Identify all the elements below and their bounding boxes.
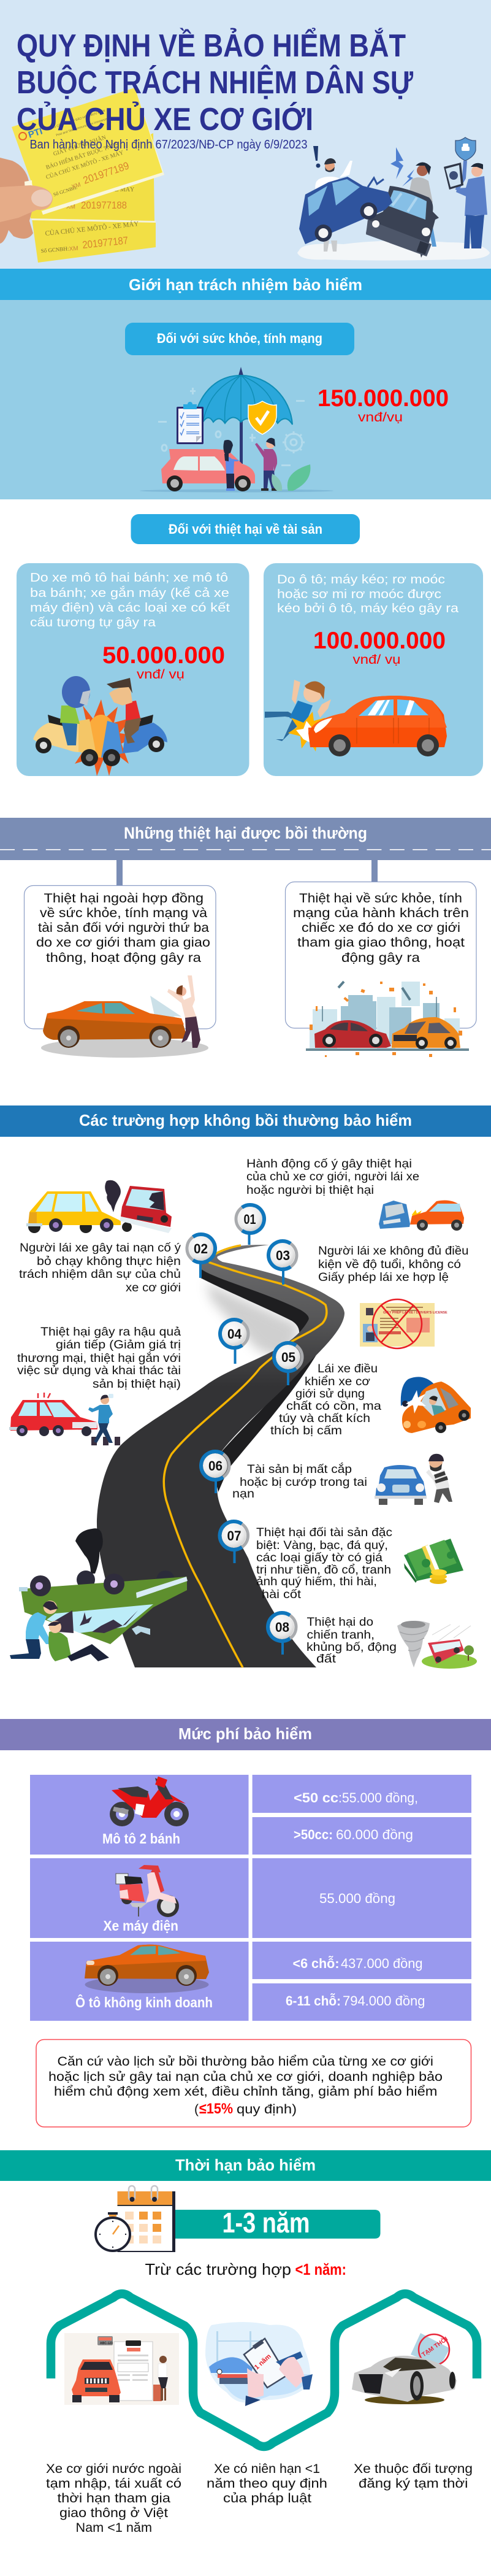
row: private car: Ô tô không kinh doanh [75,1994,213,2010]
callout: premium adjustment note: Căn cứ vào lịch sử bồi thường bảo hiểm của từng xe cơ giới [58,2055,433,2069]
text block: thông, hoạt động gây ra [46,951,201,965]
text block [30,571,230,629]
illustration: inspection clipboard [205,2322,313,2406]
pin 08: 08 [275,1620,289,1635]
value: 50 million [102,642,225,682]
text: case 1: Hành động cố ý gây thiệt hại [246,1157,412,1171]
illustration: insurance tickets in hand: TỔNG CÔNG TY CP BẢO HIỂM BƯU ĐIỆN [47,108,106,131]
icon: lightning bolts [390,147,414,186]
text block: ba bánh; xe gắn máy (kể cả xe [30,586,229,600]
vehicle: red SUV [72,2359,121,2402]
car red [314,1020,391,1048]
cell: electric price [253,1858,471,1938]
illustration: foreign vehicle paperwork: ABC-123 [100,2342,113,2345]
text: lifetime under one year: của pháp luật [223,2491,311,2505]
text: temporary registration [354,2462,473,2491]
cell: under 50cc: :55.000 đồng, [338,1790,418,1805]
illustration: insurance tickets in hand: 201977188 [81,199,127,211]
panel: header [0,0,491,269]
text: case 1: hoặc người bị thiệt hại [246,1183,374,1197]
subtitle: Ban hành theo Nghị định 67/2023/NĐ-CP ngày 6/9/2023 [29,138,308,152]
cell: electric price: 55.000 đồng [319,1891,395,1906]
text: lifetime under one year: năm theo quy định [207,2477,327,2491]
text: case 3: kiện về độ tuổi, không có [318,1258,461,1271]
illustration: insurance tickets in hand [0,88,164,263]
text block: tài sản đối với người thứ ba [38,921,209,935]
illustration: car hitting man [41,975,208,1058]
man hit [167,975,200,1048]
section: premium table [0,1719,491,2021]
text block: Thiệt hại ngoài hợp đồng [44,891,204,905]
pin 06: 06 [208,1458,223,1474]
person sitting [48,1621,109,1661]
pin 08 [262,1607,302,1655]
text: case 5: Lái xe điều [318,1362,378,1375]
illustration: insurance tickets in hand: CỦA CHỦ XE MÔTÔ - XE MÁY [45,220,139,237]
section: compensated damages [0,818,491,1058]
text: case 1 [246,1157,419,1197]
section: liability limit health [0,269,491,499]
vehicle: pink car [161,449,255,491]
pin 07 [214,1516,254,1563]
connector: left [116,860,123,885]
illustration: car crash scene [297,137,490,260]
rider red shirt [107,678,141,744]
illustration: insurance tickets in hand: BẢO HIỂM BẮT BUỘC TNDS [45,140,120,171]
text: case 7 [256,1526,392,1601]
callout: premium adjustment note [36,2039,471,2127]
illustration: insurance tickets in hand: XM [66,204,75,210]
text: case 4: Thiệt hại gây ra hậu quả [40,1325,181,1339]
text: case 2: bỏ chạy không thực hiện [37,1255,181,1268]
text: temporary registration: Xe thuộc đối tượng [354,2462,473,2476]
pin 05: 05 [281,1350,295,1365]
text: case 7: biệt: Vàng, bạc, đá quý, [256,1539,388,1552]
car orange [308,696,447,756]
scooter blue [101,715,167,766]
pin 04 [215,1314,254,1364]
person kneeling [10,1601,58,1659]
pin 01: 01 [244,1212,256,1227]
icon: clipboard [177,402,204,444]
icon: shield with car [455,137,476,161]
cell: under 50cc: <50 cc [294,1790,338,1805]
text: case 7: trị như tiền, đồ cổ, tranh [256,1563,391,1577]
text: case 6: hoặc bị cướp trong tai [240,1475,367,1489]
row: two-wheel motorbike: Mô tô 2 bánh [102,1831,180,1847]
illustration: temporary registration car [352,2333,457,2404]
icon: shield [248,401,276,434]
text: case 2: Người lái xe gây tai nạn cố ý [20,1241,181,1255]
pin 03 [263,1236,302,1285]
value: 150 million: vnđ/vụ [358,410,403,425]
text: case 5 [270,1362,381,1437]
text: case 7: hài cốt [262,1588,302,1601]
cell: 6 to 11 seats [253,1983,471,2021]
illustration: insurance tickets in hand: Post and Telecommunication Insurance [56,117,108,137]
value: 50 million: 50.000.000 [102,642,225,669]
illustration: yellow and red car crash [26,1180,172,1233]
cell: under 50cc [253,1775,471,1813]
text: foreign vehicles: tạm nhập, tái xuất có [46,2477,181,2491]
value: 150 million: 150.000.000 [318,385,449,412]
pin 07: 07 [227,1528,242,1544]
text: case 2 [19,1241,181,1294]
text: case 6 [232,1462,367,1501]
pin 06 [196,1446,235,1493]
value: 150 million [318,385,449,425]
text block: chiếc xe đó do xe cơ giới [302,921,460,935]
text: case 4: thương mại, thiệt hại gắn với [17,1351,181,1365]
cell: over 50cc [253,1817,471,1855]
pin 02: 02 [194,1241,208,1256]
illustration: insurance tickets in hand: XM [69,245,78,253]
value: 100 million: vnđ/ vụ [353,653,401,667]
text block: mạng của hành khách trên [293,906,469,920]
illustration: insurance tickets in hand: XM [71,182,82,191]
connector: right [371,860,378,882]
term badge [166,2207,380,2239]
heading bar: Các trường hợp không bồi thường bảo hiểm [79,1111,412,1129]
subheading: Trừ các trường hợp [145,2260,291,2278]
text: case 5: túy và chất kích [279,1412,370,1425]
illustration: insurance tickets in hand: 201977187 [82,234,129,251]
card: passenger damage [286,882,476,1057]
illustration: invalid driving licence [360,1299,447,1348]
title: QUY ĐỊNH VỀ BẢO HIỂM BẮT [17,28,406,64]
text: case 3: Giấy phép lái xe hợp lệ [318,1271,449,1284]
callout: premium adjustment note: ≤15% [199,2101,233,2117]
illustration: tornado and bus [397,1621,477,1669]
pill: health and life: Đối với sức khỏe, tính mạng [157,331,322,346]
illustration: umbrella protecting car and people [140,367,333,492]
text: case 8: đất [316,1652,337,1666]
illustration: foreign vehicle paperwork [64,2333,179,2405]
section: insurance term [0,2150,491,2535]
icon: exclamation mark [313,146,320,168]
text: case 3: Người lái xe không đủ điều [318,1244,468,1258]
cell: 6 to 11 seats: 6-11 chỗ: [286,1993,341,2009]
pill: health and life [125,323,354,355]
illustration: invalid driving licence: GIẤY PHÉP LÁI XE / DRIVER'S LICENSE [383,1310,447,1315]
car orange [392,1017,460,1049]
text block [293,891,469,965]
person middle [408,162,436,247]
callout: premium adjustment note: hiểm chủ động xem xét, điều chỉnh tăng, giảm phí bảo hiểm [54,2085,438,2099]
heading bar: Mức phí bảo hiểm [178,1724,312,1743]
heading bar [0,1105,491,1137]
text: case 1: của chủ xe cơ giới, người lái xe [246,1170,419,1183]
text block: máy điện) và các loại xe có kết [30,601,230,615]
text: case 6: nạn [232,1487,254,1501]
text: case 8: khủng bố, động [306,1640,397,1654]
text block: về sức khỏe, tính mạng và [40,906,207,920]
text: case 7: các loại giấy tờ có giá [256,1551,383,1564]
value: 100 million [313,628,446,667]
illustration: insurance tickets in hand: CỦA CHỦ XE MÔTÔ - XE MÁY [45,148,124,181]
heading bar [0,269,491,300]
text: case 5: khiển xe cơ [305,1375,370,1388]
text: case 2: trách nhiệm dân sự của chủ [19,1267,181,1281]
heading bar: Những thiệt hại được bồi thường [124,824,367,842]
title [17,28,414,137]
panel: car damage [264,563,483,776]
icon: orange sedan [85,1945,209,1993]
illustration: thief and blue car [375,1454,452,1505]
illustration: inspection clipboard: 1 năm [253,2353,273,2371]
text: temporary registration: đăng ký tạm thời [359,2477,468,2491]
person: woman [223,440,239,491]
text: case 8 [306,1615,397,1666]
person: man [255,438,278,491]
cell: under 6 seats [253,1942,471,1979]
value: 50 million: vnđ/ vụ [137,667,185,682]
subheading [145,2260,346,2278]
pin 03: 03 [276,1248,290,1263]
text: foreign vehicles [46,2462,181,2535]
text: foreign vehicles: Xe cơ giới nước ngoài [46,2462,181,2476]
text: lifetime under one year: Xe có niên hạn <1 [214,2462,320,2476]
pin 04: 04 [227,1326,242,1342]
text block: động gây ra [341,951,420,965]
illustration: overturned green car with injured people [10,1528,188,1661]
illustration: insurance tickets in hand: Số GCNBH: [40,245,69,254]
icon: leaves [272,464,310,491]
text: case 7: ảnh quý hiếm, thi hài, [256,1575,377,1588]
person left [315,158,352,252]
cell: under 6 seats: <6 chỗ: [293,1956,340,1971]
text block: kéo bởi ô tô, máy kéo gây ra [277,602,459,615]
pin 01 [230,1199,270,1245]
heading bar [0,2150,491,2181]
heading bar [0,1719,491,1750]
text block [277,573,459,615]
text: case 2: xe cơ giới [126,1281,181,1294]
text: case 3 [318,1244,468,1284]
row: two-wheel motorbike [30,1775,249,1855]
text block: tham gia giao thông, hoạt [297,936,465,950]
panel: motorbike damage [17,563,249,776]
title: BUỘC TRÁCH NHIỆM DÂN SỰ [17,64,414,101]
text block: cấu tương tự gây ra [30,616,156,629]
row: electric motorbike [30,1858,249,1938]
illustration: insurance tickets in hand: Số GCNBH: [53,185,78,198]
pill: property damage [131,514,360,544]
text: case 4: gián tiếp (Giảm giá trị [56,1338,181,1351]
text: case 8: chiến tranh, [306,1628,375,1642]
pill: property damage: Đối với thiệt hại về tài sản [169,521,322,537]
vehicle: dark car [366,186,439,258]
text block: Thiệt hại về sức khỏe, tính [299,891,462,905]
star burst [288,712,325,752]
icon: scooter [116,1865,179,1917]
illustration: blue and orange car bump [379,1200,464,1231]
text block: hoặc sơ mi rơ moóc được [277,588,441,601]
text: foreign vehicles: Nam <1 năm [76,2521,152,2535]
callout: premium adjustment note: quy định) [237,2102,297,2117]
icon: calendar and clock [96,2186,175,2252]
text: case 4: sản bị thiệt hại) [93,1377,181,1391]
person: woman [158,2356,168,2401]
illustration: city car collision [306,982,469,1057]
heading bar [0,818,491,860]
text: case 5: thích bị cấm [270,1424,342,1437]
rider blue helmet [60,676,91,745]
value: 100 million: 100.000.000 [313,628,446,654]
illustration: insurance tickets in hand: XE MÁY [110,186,134,193]
row: private car [30,1942,249,2021]
title: CỦA CHỦ XE CƠ GIỚI [17,101,313,137]
icon: motorbike [110,1777,189,1826]
illustration: insurance tickets in hand: GIẤY CHỨNG NHẬN [52,133,107,158]
scooter yellow [33,715,98,766]
text block [36,891,210,965]
subheading: <1 năm: [295,2260,346,2278]
text: case 6: Tài sản bị mất cắp [247,1462,352,1476]
card: third-party damage [25,886,216,1058]
person hit [265,680,331,741]
section: non-compensated cases [0,1105,491,1669]
text block: do xe cơ giới tham gia giao [36,936,210,950]
term badge: 1-3 năm [222,2207,310,2239]
illustration: damaged red car and pedestrian [9,1393,120,1445]
callout: premium adjustment note: ( [194,2102,199,2117]
illustration: insurance tickets in hand: 201977189 [82,160,131,186]
heading bar: Giới hạn trách nhiệm bảo hiểm [129,275,362,294]
text: case 7: Thiệt hại đối tài sản đặc [256,1526,392,1539]
illustration: two scooters colliding [33,676,167,776]
pedestrian [88,1394,120,1445]
text: case 5: chất có cồn, ma [286,1399,381,1413]
cell: over 50cc: >50cc: [294,1827,333,1842]
cell: over 50cc: 60.000 đồng [336,1827,413,1842]
road [97,1245,344,1667]
text: foreign vehicles: giao thông ở Việt [59,2506,168,2520]
illustration: cash and coins [404,1539,463,1584]
heading bar: Thời hạn bảo hiểm [175,2156,316,2174]
illustration: car hitting pedestrian [265,680,447,756]
text: foreign vehicles: thời hạn tham gia [58,2491,170,2505]
vehicle: blue car [299,177,392,244]
text: case 4: việc sử dụng và khai thác tài [17,1364,181,1377]
cell: 6 to 11 seats: 794.000 đồng [343,1993,425,2009]
text block: Do ô tô; máy kéo; rơ moóc [277,573,445,586]
text: case 4 [17,1325,181,1391]
pin 02 [181,1229,221,1278]
text: lifetime under one year [207,2462,327,2505]
illustration: drunk driver in orange car [401,1377,471,1433]
text: case 8: Thiệt hại do [306,1615,373,1629]
cell: under 6 seats: 437.000 đồng [341,1956,423,1971]
callout: premium adjustment note: hoặc lịch sử gây tai nạn của chủ xe cơ giới, doanh nghiệp bảo [48,2070,443,2084]
pin 05 [268,1337,308,1385]
text: case 5: giới sử dụng [295,1387,365,1401]
illustration: temporary registration car: TẠM THỜI [420,2335,449,2358]
illustration: insurance tickets in hand: PTI [27,126,44,140]
thief [426,1454,452,1503]
person right with tablet [444,161,487,248]
text block: Do xe mô tô hai bánh; xe mô tô [30,571,228,585]
row: electric motorbike: Xe máy điện [103,1918,178,1934]
hexagon frame [51,2294,477,2447]
